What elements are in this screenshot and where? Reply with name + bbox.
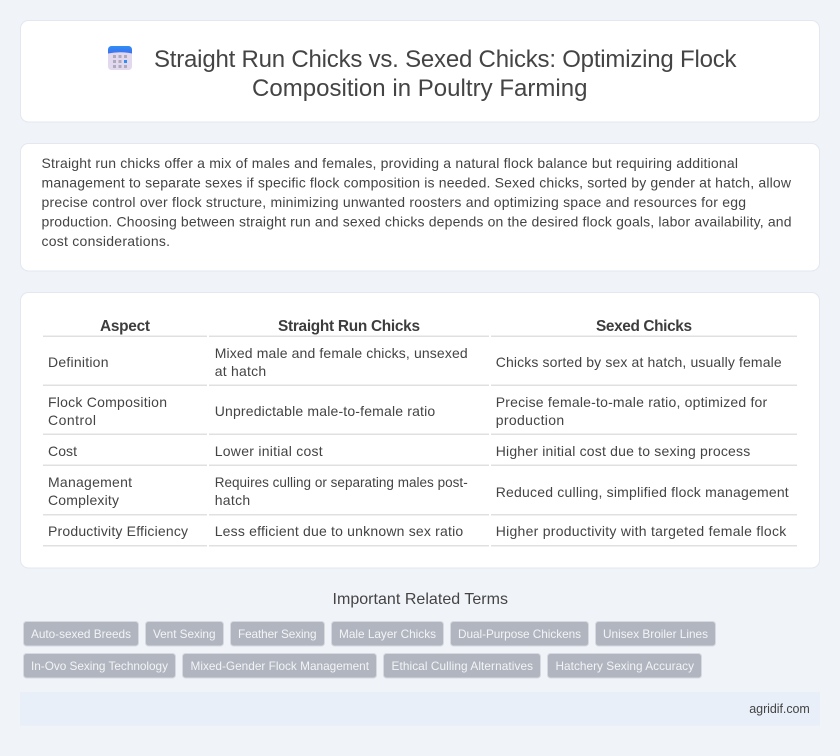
row: management complexity: Requires culling or separating males post- [215,475,468,490]
table header row: Sexed Chicks [596,318,692,335]
table header row: Straight Run Chicks [278,318,420,335]
row: flock composition control: Flock Composition [48,394,167,410]
row: productivity efficiency: Higher productivity with targeted female flock [496,523,787,539]
row: management complexity: hatch [215,492,250,508]
tag [24,622,138,646]
tag: Male Layer Chicks [339,627,436,641]
tag [146,622,224,646]
row: flock composition control: production [496,412,564,428]
panel: introduction [20,144,820,271]
row: definition [48,345,782,379]
table header row: Aspect [100,318,150,335]
text block: introduction paragraph: Straight run chicks offer a mix of males and females, providing a natural flock balance but requiring additional [42,155,738,171]
row: cost [48,443,750,459]
tag [24,654,176,678]
row: productivity efficiency [48,523,787,539]
row: definition: Definition [48,354,108,370]
tag [332,622,444,646]
title [154,46,738,102]
tag [548,654,702,678]
tag [384,654,540,678]
tag [182,654,376,678]
panel: comparison table [20,292,820,568]
tag [596,622,716,646]
tag: In-Ovo Sexing Technology [31,659,168,673]
text block: introduction paragraph: production. Choosing between straight run and sexed chicks depends on the desired flock goals, labor availability, and [42,214,792,230]
row: management complexity: Reduced culling, simplified flock management [496,484,789,500]
row: cost: Higher initial cost due to sexing process [496,443,750,459]
header panel [20,20,820,122]
related term tags [24,622,716,678]
row: definition: Chicks sorted by sex at hatch, usually female [496,354,782,370]
row: management complexity [48,474,789,508]
row: productivity efficiency: Less efficient due to unknown sex ratio [215,523,463,539]
title: Composition in Poultry Farming [252,75,588,102]
row: management complexity: Complexity [48,492,119,508]
footer [20,692,820,726]
tag [230,622,324,646]
row: definition: Mixed male and female chicks, unsexed [215,345,468,361]
tag: Feather Sexing [238,627,316,641]
tag: Unisex Broiler Lines [603,627,708,641]
tag: Ethical Culling Alternatives [392,659,533,673]
footer: agridif.com [749,702,810,716]
row: management complexity: Management [48,474,132,490]
row: productivity efficiency: Productivity Efficiency [48,523,188,539]
text block: introduction paragraph: cost considerations. [42,233,170,249]
tag: Auto-sexed Breeds [31,627,131,641]
icon: calendar [108,46,132,70]
row: flock composition control: Unpredictable male-to-female ratio [215,403,435,419]
row: definition: at hatch [215,363,266,379]
heading: important related terms: Important Related Terms [332,591,508,608]
tag: Mixed-Gender Flock Management [190,659,370,673]
tag: Hatchery Sexing Accuracy [556,659,694,673]
row: flock composition control [48,394,768,428]
tag: Dual-Purpose Chickens [458,627,581,641]
row: cost: Cost [48,443,77,459]
row: cost: Lower initial cost [215,443,323,459]
row: flock composition control: Precise female-to-male ratio, optimized for [496,394,768,410]
table header row [100,318,692,335]
row: flock composition control: Control [48,412,96,428]
text block: introduction paragraph [42,155,792,249]
text block: introduction paragraph: management to separate sexes if specific flock composition is needed. Sexed chicks, sorted by gender at hatch, allow [42,174,792,190]
tag: Vent Sexing [153,627,216,641]
title: Straight Run Chicks vs. Sexed Chicks: Optimizing Flock [154,46,738,73]
tag [450,622,588,646]
text block: introduction paragraph: precise control over flock structure, minimizing unwanted roosters and optimizing space and resources for egg [42,194,746,210]
